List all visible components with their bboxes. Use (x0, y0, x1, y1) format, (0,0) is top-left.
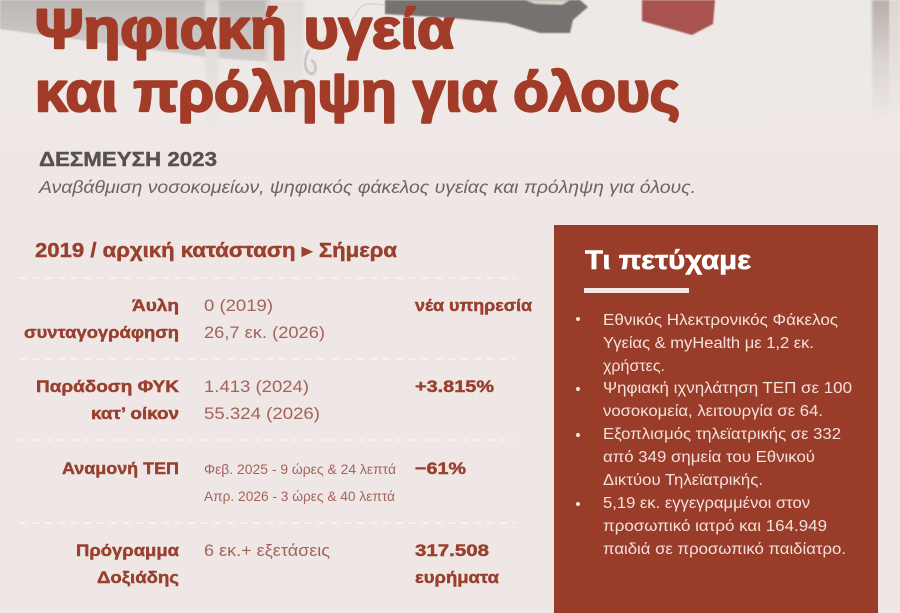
row: home delivery: 1.413 (2024) (204, 377, 309, 396)
row: Doxiadis programme: 317.508 (415, 541, 489, 560)
row: e-prescription: νέα υπηρεσία (415, 296, 533, 315)
bullet list: προσωπικό ιατρό και 164.949 (603, 518, 827, 535)
bullet list: Ψηφιακή ιχνηλάτηση ΤΕΠ σε 100 (603, 380, 852, 397)
row: Doxiadis programme: 6 εκ.+ εξετάσεις (204, 541, 330, 560)
row: Doxiadis programme: ευρήματα (415, 568, 500, 587)
bullet list: Δικτύου Τηλεϊατρικής. (603, 472, 763, 489)
bullet list: Εθνικός Ηλεκτρονικός Φάκελος (603, 312, 838, 329)
row: emergency waiting: Αναμονή ΤΕΠ (62, 459, 179, 478)
bullet list: Υγείας & myHealth με 1,2 εκ. (603, 335, 814, 352)
row: e-prescription: συνταγογράφηση (24, 323, 179, 342)
subtitle: Αναβάθμιση νοσοκομείων, ψηφιακός φάκελος υγείας και πρόληψη για όλους. (38, 177, 696, 197)
title: και πρόληψη για όλους (35, 60, 680, 123)
row: Doxiadis programme (76, 541, 500, 587)
title (35, 0, 680, 123)
row: emergency waiting: Φεβ. 2025 - 9 ώρες & 24 λεπτά (204, 462, 396, 477)
row: e-prescription (24, 296, 533, 342)
row: e-prescription: 26,7 εκ. (2026) (204, 323, 325, 342)
commitment heading: ΔΕΣΜΕΥΣΗ 2023 (39, 149, 217, 171)
row: emergency waiting: Απρ. 2026 - 3 ώρες & 40 λεπτά (204, 489, 395, 504)
bullet list: από 349 σημεία του Εθνικού (603, 449, 815, 466)
row: home delivery: κατ’ οίκον (91, 404, 179, 423)
row: e-prescription: 0 (2019) (204, 296, 273, 315)
row: emergency waiting: −61% (415, 459, 466, 478)
bullet list: χρήστες. (603, 358, 665, 375)
table heading: 2019 / αρχική κατάσταση ▸ Σήμερα (35, 240, 398, 262)
row: home delivery (36, 377, 494, 423)
row: Doxiadis programme: Πρόγραμμα (76, 541, 180, 560)
background photo: faded hospital room (0, 0, 900, 160)
row: home delivery: +3.815% (415, 377, 494, 396)
row: home delivery: Παράδοση ΦΥΚ (36, 377, 180, 396)
row: home delivery: 55.324 (2026) (204, 404, 320, 423)
bullet list: νοσοκομεία, λειτουργία σε 64. (603, 403, 823, 420)
bullet list (576, 312, 852, 558)
row: e-prescription: Άυλη (132, 296, 179, 315)
bullet list: 5,19 εκ. εγγεγραμμένοι στον (603, 495, 810, 512)
panel heading: Τι πετύχαμε (585, 245, 751, 275)
bullet list: παιδιά σε προσωπικό παιδίατρο. (603, 541, 846, 558)
row: emergency waiting (62, 459, 466, 504)
bullet list: Εξοπλισμός τηλεϊατρικής σε 332 (603, 426, 841, 443)
row: Doxiadis programme: Δοξιάδης (97, 568, 179, 587)
panel: achievements (554, 225, 878, 613)
